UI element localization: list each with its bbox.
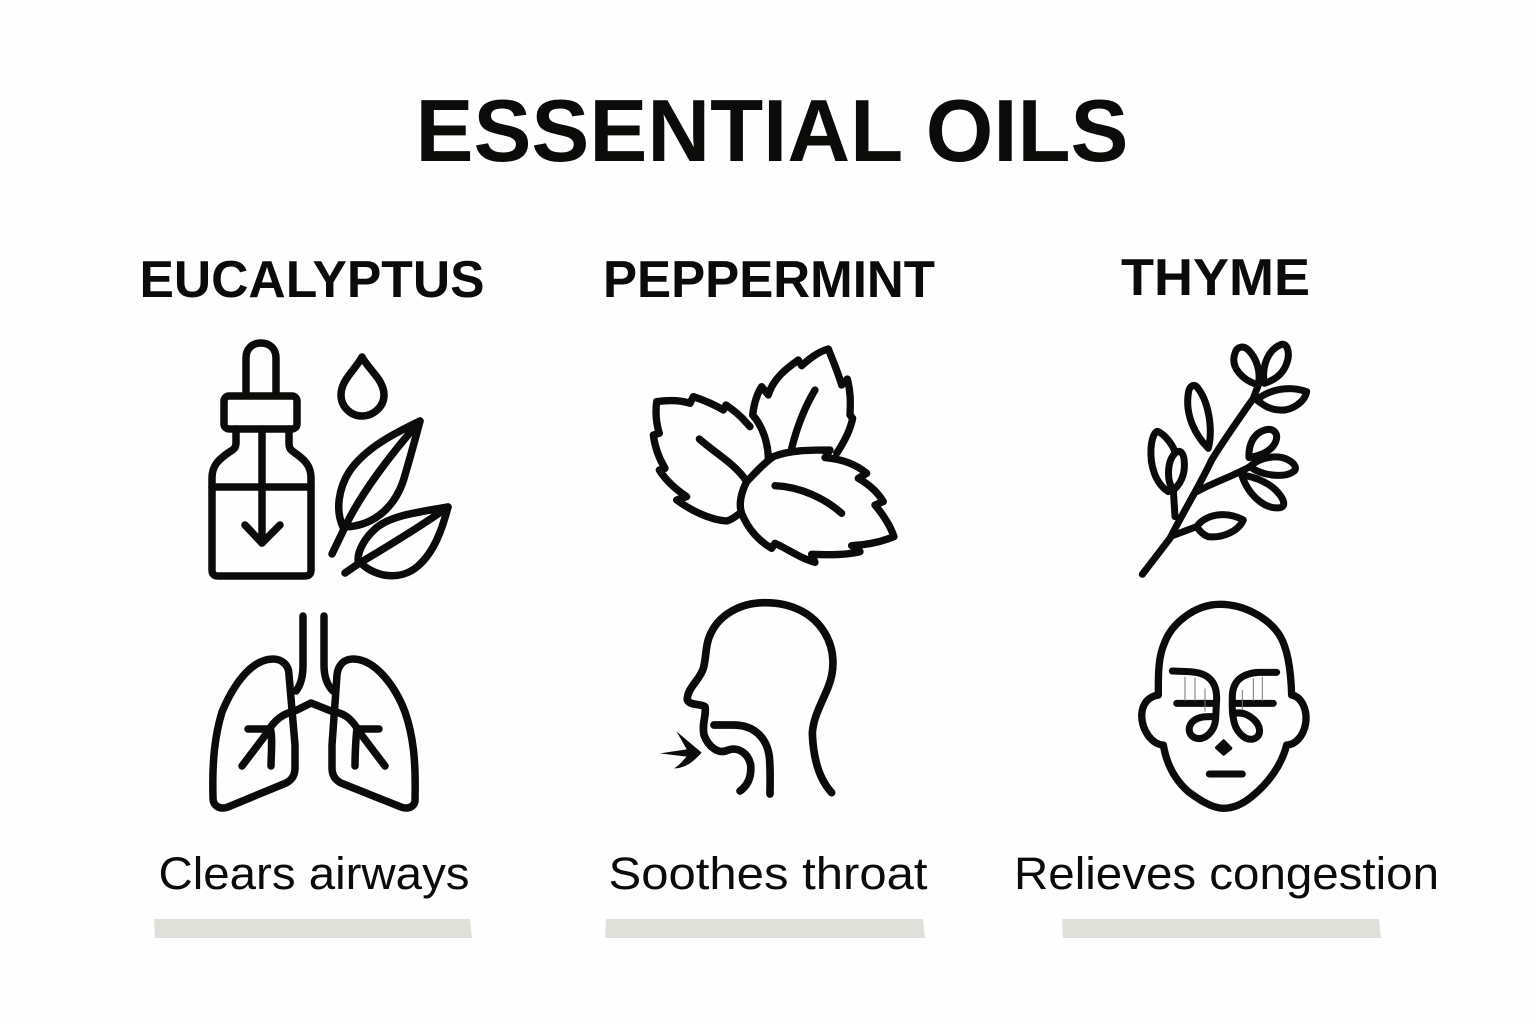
- icon: thyme sprig: [1142, 344, 1307, 574]
- caption: soothes throat: Soothes throat: [608, 848, 928, 899]
- heading: thyme: THYME: [1121, 249, 1310, 307]
- icon: face with sinuses: [1142, 604, 1306, 808]
- underline bar: peppermint: [605, 919, 925, 938]
- icon: eucalyptus leaf upper: [332, 421, 420, 554]
- heading: peppermint: PEPPERMINT: [603, 251, 935, 309]
- icon: peppermint leaves: [653, 349, 894, 562]
- icon: eucalyptus leaf lower: [345, 507, 448, 576]
- icon: dropper bottle: [212, 343, 311, 576]
- underline bar: eucalyptus: [154, 919, 472, 938]
- caption: relieves congestion: Relieves congestion: [1014, 848, 1439, 899]
- icon: head and throat profile: [660, 603, 833, 794]
- underline bar: thyme: [1062, 919, 1381, 938]
- icon: inhale arrow: [660, 732, 702, 768]
- title: ESSENTIAL OILS: [416, 81, 1128, 180]
- icon: nose: [1217, 741, 1231, 754]
- caption: clears airways: Clears airways: [158, 848, 470, 899]
- icon: mouth: [1209, 763, 1242, 784]
- icon: lungs: [213, 616, 415, 808]
- icon: oil drop: [341, 357, 384, 416]
- heading: eucalyptus: EUCALYPTUS: [140, 251, 484, 309]
